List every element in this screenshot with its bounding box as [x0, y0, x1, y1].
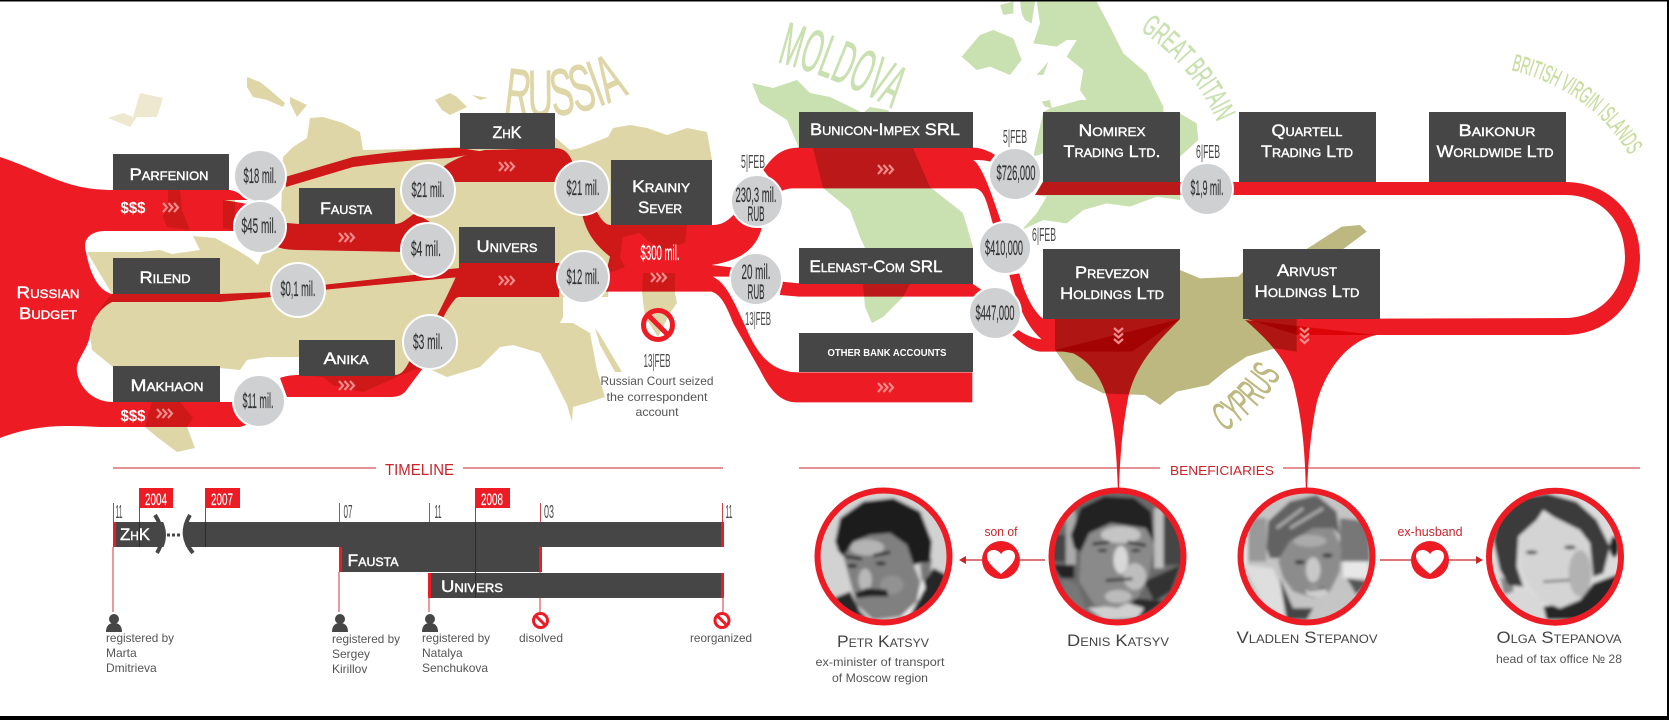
portrait: Olga Stepanova: [1486, 488, 1624, 626]
date labels: 5|FEB: [1003, 127, 1027, 147]
portrait: Petr Katsyv: [810, 485, 957, 628]
bar: Univers: Univers: [441, 577, 503, 596]
bar: ZhK: ZhK: [120, 525, 151, 544]
person names and roles: of Moscow region: [832, 671, 928, 685]
year flags: 2004: [145, 490, 167, 509]
amount labels: $11 mil.: [242, 390, 274, 413]
month ticks: 07: [344, 502, 352, 522]
bar: Fausta: Fausta: [348, 551, 398, 570]
heading: Russian Budget: Budget: [19, 304, 78, 323]
company names: Anika: [324, 349, 368, 368]
callout: court seizure: Russian Court seized: [600, 374, 714, 388]
amount labels: 20 mil.: [742, 261, 770, 284]
map of Great Britain: [962, 2, 1198, 230]
timeline captions: Senchukova: [422, 661, 488, 675]
company names: Holdings Ltd: [1060, 284, 1164, 303]
stream: to Prevezon: [1009, 273, 1180, 352]
portrait: Vladlen Stepanov: [1233, 485, 1380, 628]
stream: Krainiy Sever and onward: [582, 148, 1002, 402]
heading: Russian Budget: Russian: [16, 283, 80, 302]
bar: ZhK: [113, 515, 724, 554]
person names and roles: Denis Katsyv: [1067, 631, 1169, 650]
bar: Univers: [428, 573, 724, 598]
money markers and flow chevrons: $$$: [120, 200, 146, 217]
company names: Nomirex: [1078, 121, 1146, 140]
relation: ex-husband: ex-husband: [1398, 524, 1462, 539]
date labels: 13|FEB: [745, 309, 771, 329]
text: $1,9 mil.: [1190, 177, 1224, 200]
icons: closed companies: [534, 614, 729, 628]
map of Moldova: [752, 80, 973, 323]
person names and roles: [816, 628, 1622, 685]
year flags: [139, 488, 510, 522]
callout: court seizure: [600, 310, 714, 419]
amount labels: [242, 162, 1224, 413]
portrait: Denis Katsyv: [1044, 485, 1191, 628]
label: Great Britain: GREAT BRITAIN: [1143, 16, 1236, 122]
icons: registrar persons: [106, 614, 438, 632]
amount circles: [233, 148, 1233, 427]
amount labels: $410,000: [985, 237, 1023, 260]
stream: offshore loop: [1035, 182, 1640, 335]
funnel to Denis Katsyv: [1055, 319, 1180, 492]
timeline captions: Marta: [106, 646, 137, 660]
timeline captions: Natalya: [422, 646, 463, 660]
relation: son of: [959, 524, 1045, 579]
section heading: timeline: TIMELINE: [385, 462, 454, 479]
amount labels: RUB: [748, 203, 764, 226]
company names: Fausta: [320, 199, 372, 218]
date labels: 6|FEB: [1032, 225, 1056, 245]
heading: Russian Budget: [16, 283, 80, 323]
month ticks: 03: [544, 502, 554, 522]
company names: Makhaon: [130, 376, 204, 395]
amount labels: $447,000: [976, 302, 1014, 325]
timeline connector lines: [113, 547, 723, 612]
timeline captions: registered by: [422, 631, 490, 645]
timeline captions: Kirillov: [332, 662, 367, 676]
month ticks: 11: [434, 502, 442, 522]
map of Russia: [87, 77, 712, 452]
timeline chart: 11: [726, 502, 732, 522]
company names: Arivust: [1277, 261, 1338, 280]
company names: ZhK: [492, 123, 522, 142]
company names: Elenast-Com SRL: [810, 257, 942, 276]
date labels: 5|FEB: [741, 152, 765, 172]
icon: heart: [982, 541, 1020, 579]
timeline captions: [106, 631, 752, 676]
relation: ex-husband: [1380, 524, 1483, 579]
company names: Parfenion: [130, 165, 208, 184]
label: Cyprus: CYPRUS: [1213, 362, 1280, 430]
bar: Fausta: [339, 547, 542, 572]
amount labels: $21 mil.: [412, 179, 444, 202]
amount labels: $18 mil.: [244, 165, 276, 188]
year flags: 2007: [211, 490, 233, 509]
amount labels: 230,3 mil.: [736, 184, 776, 207]
year flags: 2008: [481, 490, 503, 509]
label: British Virgin Islands: BRITISH VIRGIN ISLANDS: [1512, 54, 1642, 154]
amount labels: $0,1 mil.: [280, 278, 316, 301]
person names and roles: Vladlen Stepanov: [1236, 628, 1378, 647]
person names and roles: Olga Stepanova: [1496, 628, 1622, 647]
company names: Worldwide Ltd: [1436, 142, 1554, 161]
month ticks: 11: [116, 502, 122, 522]
amount labels: $726,000: [996, 162, 1036, 185]
date labels: [741, 127, 1220, 329]
money flow streams: [0, 148, 1640, 438]
company names: OTHER BANK ACCOUNTS: [828, 347, 946, 359]
callout: court seizure: the correspondent: [606, 390, 708, 404]
label: Russia: RUSSIA: [506, 56, 630, 116]
timeline captions: Sergey: [332, 647, 370, 661]
company names: Sever: [638, 198, 682, 217]
month ticks: [114, 502, 732, 522]
money markers and flow chevrons: [120, 162, 1309, 425]
amount labels: $45 mil.: [242, 215, 276, 238]
company names: Univers: [476, 237, 538, 256]
map of Cyprus: [1055, 225, 1367, 405]
company names: Trading Ltd.: [1064, 142, 1160, 161]
icon: heart: [1411, 541, 1449, 579]
person names and roles: ex-minister of transport: [816, 655, 945, 669]
timeline captions: reorganized: [690, 631, 752, 645]
funnel to Vladlen Stepanov: [1245, 320, 1377, 492]
person names and roles: head of tax office № 28: [1496, 652, 1622, 666]
text: 6|FEB: [1196, 142, 1220, 162]
amount labels: $21 mil.: [566, 177, 600, 200]
company boxes: [113, 112, 1566, 402]
amount labels: $3 mil.: [413, 331, 443, 354]
timeline chart: [106, 488, 752, 676]
company names: Quartell: [1272, 121, 1343, 140]
timeline captions: Dmitrieva: [106, 661, 157, 675]
timeline captions: registered by: [332, 632, 400, 646]
timeline captions: disolved: [519, 631, 563, 645]
company names: Trading Ltd: [1261, 142, 1353, 161]
amount labels: RUB: [748, 281, 764, 304]
timeline captions: registered by: [106, 631, 174, 645]
icon: stop sign: [644, 310, 672, 340]
company names: [130, 120, 1554, 395]
callout: court seizure: account: [636, 405, 679, 419]
amount labels: $300 mil.: [640, 242, 680, 265]
money markers and flow chevrons: $$$: [120, 408, 146, 425]
amount labels: $4 mil.: [411, 238, 441, 261]
company names: Baikonur: [1458, 121, 1536, 140]
section heading: beneficiaries: BENEFICIARIES: [1170, 464, 1274, 478]
company names: Holdings Ltd: [1254, 282, 1360, 301]
amount labels: $12 mil.: [566, 266, 600, 289]
company names: Krainiy: [632, 177, 690, 196]
relation: son of: son of: [984, 524, 1018, 539]
company names: Rilend: [140, 268, 191, 287]
callout: court seizure: 13|FEB: [644, 351, 670, 371]
company names: Bunicon-Impex SRL: [810, 120, 960, 139]
company names: Prevezon: [1075, 263, 1149, 282]
label: Moldova: MOLDOVA: [778, 22, 906, 109]
person names and roles: Petr Katsyv: [837, 632, 929, 651]
